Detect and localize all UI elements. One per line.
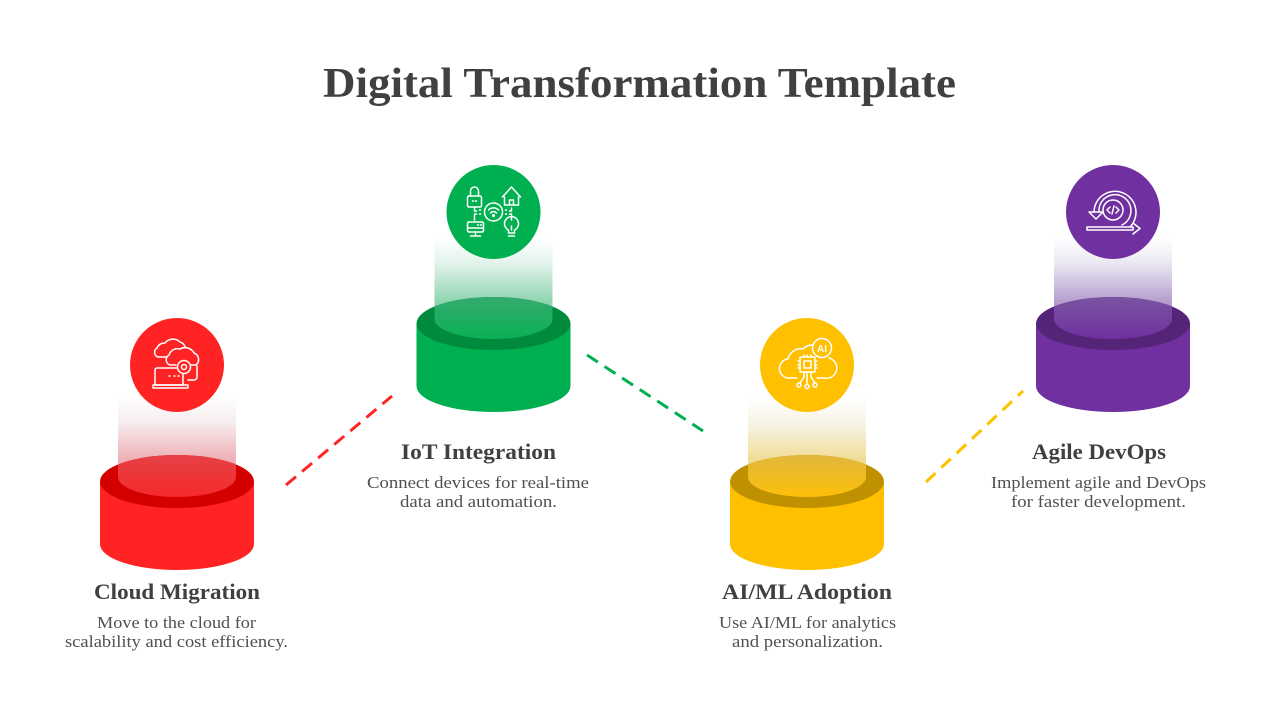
connector: red dashed line: [286, 396, 392, 485]
label: agile devops: Agile DevOps: [1032, 439, 1166, 464]
icon: agile loop with code: [1087, 191, 1140, 234]
label: AI/ML adoption: [719, 579, 896, 651]
label: AI/ML adoption: Use AI/ML for analytics: [719, 613, 896, 632]
label: AI/ML adoption: and personalization.: [732, 632, 883, 651]
label: IoT integration: Connect devices for real-time: [367, 473, 589, 492]
label: cloud migration: [65, 579, 288, 651]
cylinder: AI/ML adoption: [730, 318, 884, 570]
label: cloud migration: Cloud Migration: [94, 579, 260, 604]
label: agile devops: for faster development.: [1011, 492, 1186, 511]
title: Digital Transformation Template: [323, 61, 956, 107]
icon: AI cloud chip: [779, 338, 837, 388]
cylinder: agile devops: [1036, 165, 1190, 412]
connector: green dashed line: [587, 355, 703, 431]
label: cloud migration: scalability and cost efficiency.: [65, 632, 288, 651]
icon text: AI: AI: [817, 344, 827, 355]
label: IoT integration: data and automation.: [400, 492, 557, 511]
connector: yellow dashed line: [926, 391, 1023, 482]
cylinder: IoT integration: [416, 165, 570, 412]
label: agile devops: [991, 439, 1206, 511]
label: AI/ML adoption: AI/ML Adoption: [722, 579, 892, 604]
icon: cloud and laptop: [153, 339, 199, 388]
cylinder: cloud migration: [100, 318, 254, 570]
label: IoT integration: IoT Integration: [401, 439, 556, 464]
icon: IoT network: [468, 187, 520, 236]
label: IoT integration: [367, 439, 589, 511]
label: cloud migration: Move to the cloud for: [97, 613, 256, 632]
label: agile devops: Implement agile and DevOps: [991, 473, 1206, 492]
